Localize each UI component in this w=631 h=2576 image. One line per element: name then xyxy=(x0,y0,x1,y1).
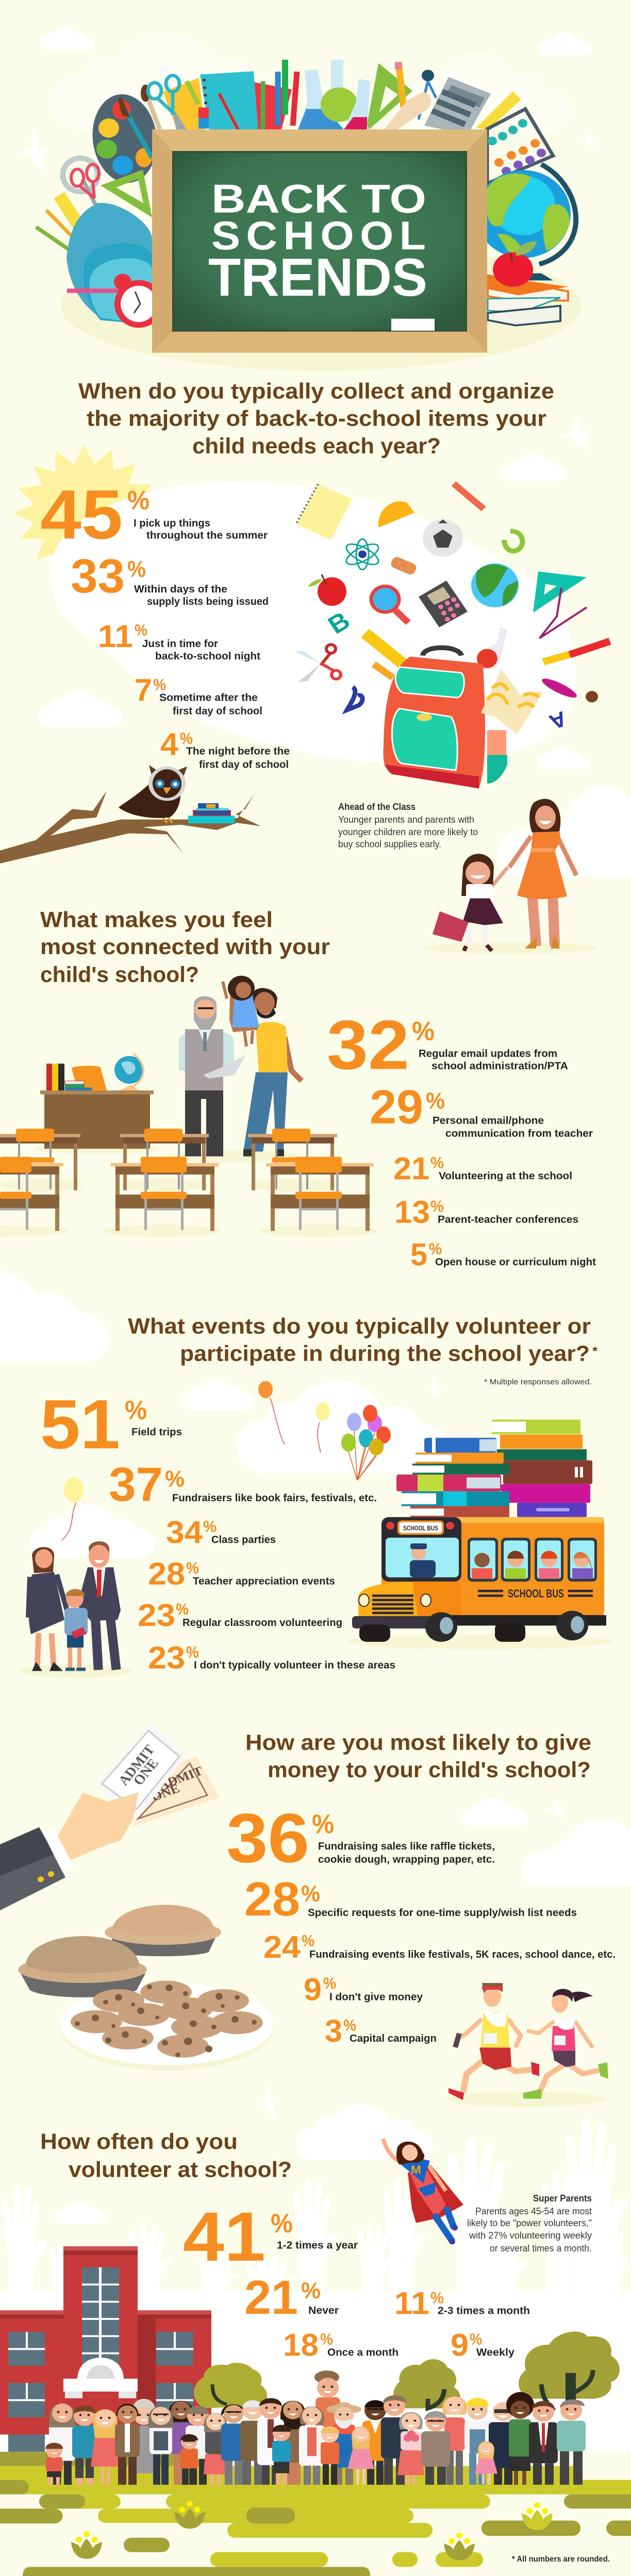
icon: owl xyxy=(119,765,187,823)
stat: 32 percent: school administration/PTA xyxy=(431,1060,568,1072)
stat: 23 percent classroom xyxy=(138,1598,342,1633)
stat: 11 percent: % xyxy=(430,2289,444,2307)
stat: 36 percent: 36 xyxy=(226,1799,309,1877)
icon: lotus flowers xyxy=(71,2501,553,2560)
icon: flask xyxy=(473,628,507,669)
stat: 23 percent none: I don't typically volunteer in these areas xyxy=(194,1659,395,1671)
tree branch xyxy=(0,791,261,863)
icon: magnifier, scissors, set square xyxy=(63,158,152,217)
stat: 9 percent: % xyxy=(323,1974,336,1992)
daughter xyxy=(433,854,508,951)
callout: super parents: with 27% volunteering weekly xyxy=(469,2231,592,2241)
heading: volunteer frequency: volunteer at school? xyxy=(69,2158,292,2182)
stat: 28 percent xyxy=(148,1556,335,1591)
illustration: school bus xyxy=(345,1517,613,1649)
illustration: stack of books xyxy=(396,1420,592,1517)
stat: 37 percent xyxy=(109,1458,377,1511)
hand xyxy=(58,1792,139,1860)
stat: 34 percent: % xyxy=(203,1517,217,1535)
stat: 11 percent xyxy=(98,619,260,662)
icon: apple xyxy=(308,574,346,606)
illustration: crowd of people xyxy=(45,2370,586,2485)
heading: giving money: money to your child's school? xyxy=(268,1758,591,1782)
decorative clouds and bird xyxy=(0,1270,451,1558)
icon: letter C xyxy=(504,531,522,551)
stat: 36 percent: Fundraising sales like raffle tickets, xyxy=(318,1841,495,1852)
icon: pencil, compass and scroll xyxy=(384,62,436,129)
stat: 3 percent: % xyxy=(343,2016,356,2034)
icon: open book xyxy=(481,669,543,735)
stat: 9 percent: I don't give money xyxy=(329,1991,423,2003)
icon: calculator xyxy=(419,581,468,628)
stat: 28 percent: % xyxy=(301,1880,320,1906)
stat: 51 percent: % xyxy=(125,1395,147,1425)
stat: 29 percent: 29 xyxy=(370,1081,423,1134)
illustration: mother and daughter xyxy=(422,786,631,954)
school portico xyxy=(63,2358,138,2398)
ticket: beige: ONE xyxy=(150,1782,182,1804)
sleeve xyxy=(0,1827,73,1910)
icon: eraser xyxy=(389,555,418,576)
stat: 51 percent: 51 xyxy=(40,1385,120,1463)
stat: 41 percent xyxy=(183,2198,358,2276)
stat: 9 percent: Weekly xyxy=(476,2347,514,2358)
female runner xyxy=(523,1989,608,2098)
stat: 24 percent: % xyxy=(302,1931,314,1950)
male runner xyxy=(449,1983,539,2100)
icon: superhero parent: M xyxy=(411,2163,421,2176)
bus wheels xyxy=(359,1611,588,1642)
icon: soccer ball xyxy=(423,519,463,557)
icon: superhero parent xyxy=(383,2139,463,2244)
stat: 28 percent: % xyxy=(186,1558,199,1577)
stat: 21 percent: % xyxy=(430,1154,444,1172)
stat: 45 percent xyxy=(40,476,268,553)
stat: 23 percent none xyxy=(148,1640,395,1675)
icon: books and apple xyxy=(488,241,568,326)
ticket: beige xyxy=(133,1756,219,1827)
stat: 5 percent: % xyxy=(429,1240,442,1258)
stat: 9 percent: % xyxy=(470,2330,482,2348)
icon: notepad xyxy=(296,484,352,540)
stat: 4 percent: first day of school xyxy=(199,759,289,770)
stat: 29 percent: % xyxy=(426,1088,445,1113)
icon: scissors xyxy=(294,645,341,682)
icon: letter A: A xyxy=(546,707,571,734)
illustration: school building xyxy=(0,2246,211,2452)
stat: 21 percent xyxy=(244,2271,339,2324)
icon: science flasks xyxy=(298,60,370,129)
stat: 7 percent xyxy=(135,673,262,717)
stat: 21 percent: Never xyxy=(308,2305,339,2316)
stat: 3 percent: Capital campaign xyxy=(350,2033,437,2044)
stat: 11 percent: 11 xyxy=(394,2286,429,2321)
icon: drawing compass xyxy=(539,588,587,638)
ticket: white xyxy=(94,1723,187,1817)
callout: super parents: likely to be "power volunteers," xyxy=(467,2218,592,2229)
pie front xyxy=(18,1936,147,1997)
stat: 4 percent: The night before the xyxy=(186,745,290,757)
cookies xyxy=(71,1980,263,2058)
stat: 4 percent: % xyxy=(180,729,193,748)
stat: 11 percent xyxy=(394,2286,530,2321)
stat: 7 percent: Sometime after the xyxy=(159,692,258,703)
stat: 13 percent: % xyxy=(430,1197,444,1215)
illustration: tickets in hand xyxy=(0,1723,219,1910)
icon: ruler, pencil and pen xyxy=(36,192,87,255)
heading: events: participate in during the school year? xyxy=(180,1342,590,1366)
title xyxy=(208,177,427,307)
boy xyxy=(64,1589,88,1671)
stat: 5 percent: Open house or curriculum night xyxy=(435,1257,596,1268)
illustration: trees xyxy=(194,2332,620,2418)
stat: 21 percent: 21 xyxy=(244,2271,298,2324)
decorative clouds and bird xyxy=(38,417,592,769)
stat: 28 percent: 28 xyxy=(244,1873,300,1926)
footnote: rounding: * All numbers are rounded. xyxy=(512,2555,610,2564)
student desks xyxy=(0,1129,377,1237)
icon: paint palette xyxy=(88,84,161,186)
icon: pen xyxy=(543,641,610,662)
stat: 9 percent xyxy=(304,1972,423,2007)
heading: volunteer frequency: How often do you xyxy=(40,2129,238,2154)
stat: 45 percent: 45 xyxy=(40,476,123,553)
icon: red backpack xyxy=(383,648,507,788)
icon: green set square xyxy=(367,63,412,129)
icon: ruler xyxy=(476,91,521,129)
callout: super parents: Super Parents xyxy=(533,2193,592,2204)
stat: 33 percent: supply lists being issued xyxy=(147,596,269,607)
stat: 21 percent: Volunteering at the school xyxy=(439,1171,572,1182)
stat: 33 percent: Within days of the xyxy=(134,584,227,595)
icon: alarm clock xyxy=(114,274,163,328)
stat: 9 percent xyxy=(451,2328,514,2363)
stat: 23 percent none: 23 xyxy=(148,1640,185,1675)
mother xyxy=(509,799,576,948)
callout: ahead of the class: Younger parents and parents with xyxy=(338,815,474,825)
icon: paint brush xyxy=(540,675,598,702)
illustration: pies and cookies xyxy=(18,1905,274,2071)
mother xyxy=(28,1547,67,1671)
callout: ahead of the class: buy school supplies early. xyxy=(338,839,441,850)
callout: super parents: Parents ages 45-54 are most xyxy=(475,2207,592,2217)
icon: calculator xyxy=(424,77,491,129)
stat: 3 percent: 3 xyxy=(325,2013,342,2049)
stat: 21 percent xyxy=(393,1151,572,1186)
icon: letter B: B xyxy=(323,606,355,639)
icon: books on branch xyxy=(188,803,235,823)
stat: 5 percent xyxy=(410,1237,596,1272)
stat: 13 percent: Parent-teacher conferences xyxy=(438,1214,578,1225)
teacher xyxy=(179,996,245,1156)
heading: collecting supplies: child needs each year? xyxy=(192,434,441,459)
stat: 4 percent: 4 xyxy=(160,727,179,762)
scattered school supplies xyxy=(294,484,610,788)
icon: abacus xyxy=(487,109,553,183)
icon: atom xyxy=(343,539,381,570)
ticket: white: ADMIT xyxy=(115,1742,158,1788)
stat: 34 percent: 34 xyxy=(166,1515,203,1550)
stat: 51 percent: Field trips xyxy=(131,1427,182,1438)
stat: 21 percent: % xyxy=(301,2278,321,2303)
ticket: beige: ADMIT xyxy=(157,1764,205,1793)
stat: 36 percent: cookie dough, wrapping paper, etc. xyxy=(318,1854,495,1865)
stat: 36 percent: % xyxy=(312,1809,334,1839)
heading: events: * xyxy=(592,1344,597,1358)
heading: events: What events do you typically volunteer or xyxy=(128,1314,591,1338)
callout: ahead of the class: younger children are more likely to xyxy=(338,827,478,838)
stat: 13 percent xyxy=(394,1195,578,1230)
stat: 41 percent: 1-2 times a year xyxy=(277,2240,358,2251)
icon: magnifier xyxy=(371,586,408,622)
stat: 18 percent: % xyxy=(320,2330,333,2348)
ground bands xyxy=(0,2452,631,2576)
stat: 51 percent xyxy=(40,1385,182,1463)
stat: 24 percent xyxy=(263,1929,616,1964)
heading: giving money: How are you most likely to give xyxy=(245,1731,591,1755)
stat: 4 percent xyxy=(160,727,290,770)
title: TRENDS xyxy=(208,247,427,307)
decorative clouds and bird xyxy=(258,1798,631,2118)
decorative clouds xyxy=(54,2105,433,2224)
bus side label: SCHOOL BUS xyxy=(508,1587,564,1600)
stat: 7 percent: % xyxy=(153,675,166,693)
illustration: family xyxy=(20,1541,131,1677)
stat: 18 percent xyxy=(283,2328,398,2363)
illustration: classroom xyxy=(0,976,377,1237)
callout: ahead of the class xyxy=(338,802,478,850)
stat: 32 percent: 32 xyxy=(327,1006,409,1084)
stat: 21 percent: 21 xyxy=(393,1151,429,1186)
stat: 33 percent: 33 xyxy=(71,550,125,603)
stat: 37 percent: Fundraisers like book fairs, festivals, etc. xyxy=(172,1493,377,1504)
stat: 11 percent: Just in time for xyxy=(142,638,218,650)
stat: 34 percent: Class parties xyxy=(211,1534,276,1546)
teacher desk xyxy=(40,1054,154,1149)
bus sign text: SCHOOL BUS xyxy=(403,1524,438,1532)
heading: connection with school xyxy=(40,908,330,987)
hero illustration xyxy=(21,27,601,371)
heading: collecting supplies xyxy=(78,379,554,459)
stat: 23 percent classroom: % xyxy=(176,1600,189,1618)
heading: giving money xyxy=(245,1731,591,1782)
stat: 7 percent: 7 xyxy=(135,673,152,708)
icon: protractor xyxy=(378,501,414,528)
white blob background xyxy=(51,482,576,765)
plate xyxy=(60,1983,274,2071)
heading: connection with school: most connected with your xyxy=(40,935,330,959)
school windows xyxy=(8,2267,193,2452)
stat: 11 percent: % xyxy=(135,621,147,639)
stat: 36 percent xyxy=(226,1799,495,1877)
stat: 45 percent: % xyxy=(127,486,150,515)
icon: scissors and paper clip xyxy=(148,76,198,129)
icon: navy letter xyxy=(347,687,362,710)
icon: teal set square xyxy=(533,571,587,613)
stat: 29 percent: communication from teacher xyxy=(445,1128,593,1139)
ticket: white: ONE xyxy=(130,1756,161,1788)
callout: super parents xyxy=(467,2193,592,2254)
stat: 41 percent: 41 xyxy=(183,2198,265,2276)
heading: connection with school: child's school? xyxy=(40,962,199,987)
chalkboard xyxy=(152,129,487,352)
stat: 34 percent xyxy=(166,1515,276,1550)
stat: 23 percent none: % xyxy=(186,1643,199,1661)
stat: 41 percent: % xyxy=(271,2209,293,2239)
stat: 11 percent: 2-3 times a month xyxy=(438,2305,530,2317)
footnote: multiple responses: * Multiple responses allowed. xyxy=(484,1378,592,1386)
stat: 32 percent: Regular email updates from xyxy=(419,1048,557,1059)
stat: 29 percent xyxy=(370,1081,593,1139)
heading: volunteer frequency xyxy=(40,2129,292,2182)
icon: pencil xyxy=(374,664,393,677)
stat: 37 percent: % xyxy=(165,1466,185,1492)
heading: connection with school: What makes you feel xyxy=(40,908,273,932)
stat: 28 percent: 28 xyxy=(148,1556,185,1591)
title: SCHOOL xyxy=(211,214,426,258)
icon: blue backpack xyxy=(67,203,152,325)
stat: 9 percent: 9 xyxy=(451,2328,469,2363)
callout: super parents: or several times a month. xyxy=(490,2244,592,2254)
stat: 28 percent: Specific requests for one-time supply/wish list needs xyxy=(308,1907,577,1919)
heading: events xyxy=(128,1314,597,1366)
sunburst behind 45 percent xyxy=(13,445,151,560)
callout: ahead of the class: Ahead of the Class xyxy=(338,802,416,812)
stat: 18 percent: Once a month xyxy=(327,2347,398,2358)
stat: 3 percent xyxy=(325,2013,437,2049)
stat: 23 percent classroom: Regular classroom volunteering xyxy=(182,1617,342,1629)
stat: 5 percent: 5 xyxy=(410,1237,427,1272)
stat: 45 percent: I pick up things xyxy=(134,518,210,529)
stat: 32 percent xyxy=(327,1006,568,1084)
icon: small globe xyxy=(471,563,519,607)
icon: ruler xyxy=(365,633,405,665)
stat: 24 percent: 24 xyxy=(263,1929,301,1964)
father xyxy=(77,1541,121,1670)
pie back xyxy=(105,1905,221,1956)
heading: collecting supplies: When do you typically collect and organize xyxy=(78,379,554,403)
stat: 11 percent: back-to-school night xyxy=(155,651,260,662)
raised hands background xyxy=(0,2118,631,2452)
stat: 18 percent: 18 xyxy=(283,2328,319,2363)
stat: 28 percent xyxy=(244,1873,577,1926)
balloons xyxy=(61,1381,391,1540)
father and child xyxy=(223,976,302,1156)
icon: pencil xyxy=(454,484,484,509)
title: BACK TO xyxy=(211,177,426,222)
stat: 37 percent: 37 xyxy=(109,1458,163,1511)
icon: pencils and pen xyxy=(263,60,297,129)
stat: 29 percent: Personal email/phone xyxy=(433,1115,544,1126)
stat: 13 percent: 13 xyxy=(394,1195,430,1230)
stat: 33 percent xyxy=(71,550,269,607)
illustration: runners xyxy=(448,1983,608,2107)
bus driver xyxy=(410,1544,436,1578)
stat: 45 percent: throughout the summer xyxy=(146,530,268,541)
stat: 28 percent: Teacher appreciation events xyxy=(193,1575,335,1587)
stat: 7 percent: first day of school xyxy=(173,705,262,717)
heading: collecting supplies: the majority of back-to-school items your xyxy=(87,406,546,431)
stat: 33 percent: % xyxy=(127,556,146,582)
stat: 9 percent: 9 xyxy=(304,1972,322,2007)
stat: 23 percent classroom: 23 xyxy=(138,1598,175,1633)
stat: 11 percent: 11 xyxy=(98,619,133,654)
icon: yellow and teal notebooks xyxy=(163,71,292,129)
stat: 32 percent: % xyxy=(412,1016,435,1046)
bus windows with children xyxy=(468,1538,597,1582)
icon: globe xyxy=(476,164,576,280)
